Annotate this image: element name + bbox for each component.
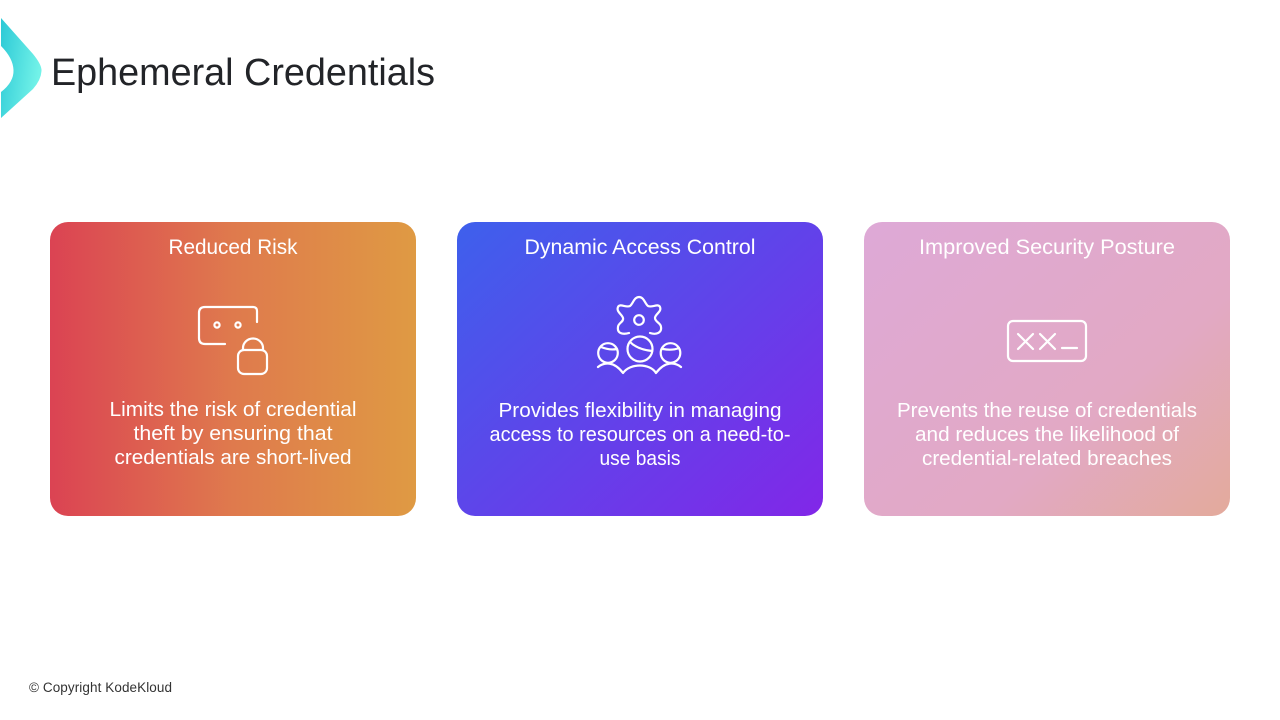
logo chevron	[1, 18, 42, 118]
icon: chat box with lock	[199, 307, 267, 374]
body text: dynamic access control	[490, 399, 790, 470]
heading: improved security posture: Improved Security Posture	[919, 235, 1175, 259]
body text: dynamic access control: access to resources on a need-to-	[490, 423, 790, 446]
body text: dynamic access control: use basis	[600, 447, 680, 470]
body text: dynamic access control: Provides flexibility in managing	[498, 399, 782, 422]
body text: improved security posture: credential-related breaches	[922, 447, 1172, 470]
body text: improved security posture: and reduces the likelihood of	[915, 423, 1179, 446]
panel: improved security posture	[864, 222, 1230, 516]
footer copyright: © Copyright KodeKloud	[29, 680, 172, 695]
body text: reduced risk: credentials are short-lived	[114, 446, 352, 469]
panel: dynamic access control	[457, 222, 823, 516]
panel: reduced risk	[50, 222, 416, 516]
body text: reduced risk	[110, 398, 356, 469]
icon: masked password field	[1008, 321, 1086, 361]
body text: reduced risk: theft by ensuring that	[134, 422, 333, 445]
icon: gear with people	[598, 297, 681, 373]
body text: improved security posture: Prevents the reuse of credentials	[897, 399, 1197, 422]
body text: improved security posture	[897, 399, 1197, 470]
body text: reduced risk: Limits the risk of credential	[110, 398, 356, 421]
heading: dynamic access control: Dynamic Access Control	[524, 235, 756, 259]
heading: reduced risk: Reduced Risk	[168, 235, 298, 259]
title: Ephemeral Credentials	[51, 52, 435, 94]
